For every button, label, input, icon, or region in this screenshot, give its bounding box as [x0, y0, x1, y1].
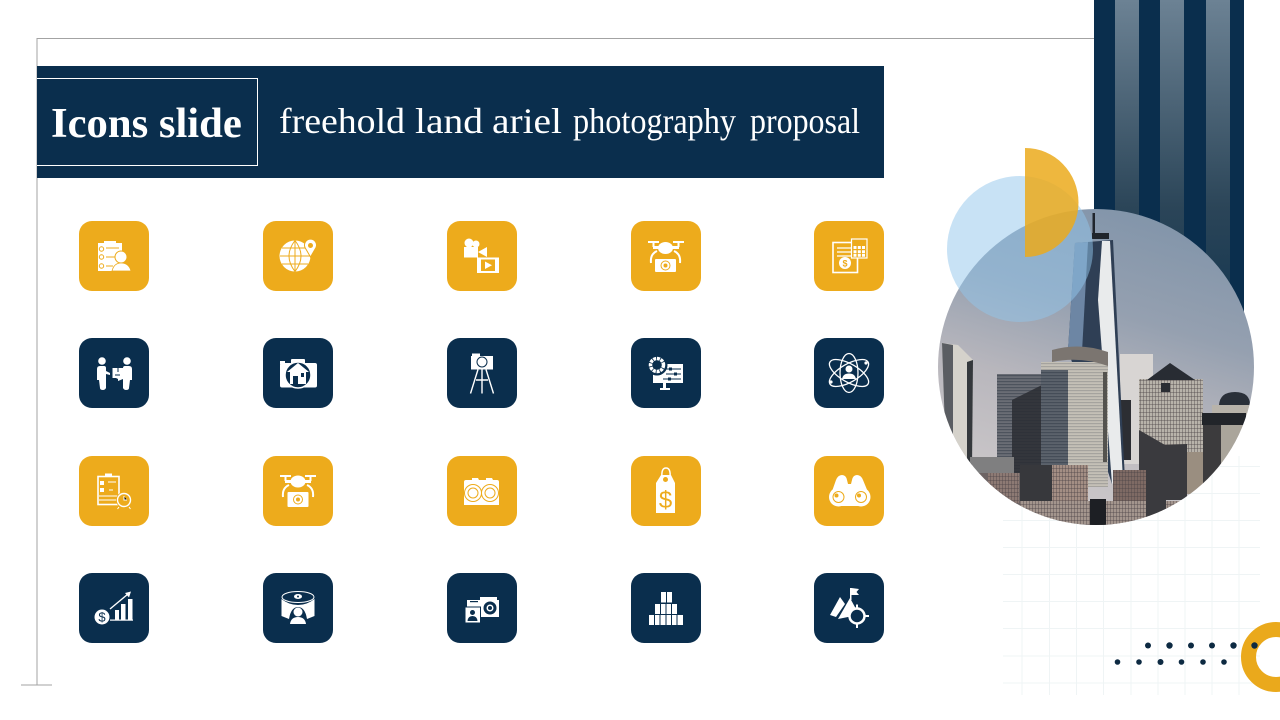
- icon: atom with person: [814, 338, 884, 408]
- subtitle: [279, 101, 860, 141]
- icon: camera with portrait photo: [447, 573, 517, 643]
- icon: video camera and player: [447, 221, 517, 291]
- spire tower: [1068, 213, 1125, 484]
- left building: [942, 343, 973, 470]
- subtitle: land: [415, 101, 483, 141]
- icon: schedule clipboard and clock: [79, 456, 149, 526]
- icon: stacked boxes: [631, 573, 701, 643]
- title banner: [37, 66, 884, 178]
- white tower behind: [1120, 354, 1153, 464]
- domed building: [1202, 392, 1251, 490]
- icon: camera with twin lenses: [447, 456, 517, 526]
- icon: camera drone: [263, 456, 333, 526]
- dot over ring: [1251, 642, 1258, 649]
- icon: money growth chart: [79, 573, 149, 643]
- background grid: [1003, 456, 1260, 695]
- icon: two people exchanging a box: [79, 338, 149, 408]
- icon: 360 degree view with person: [263, 573, 333, 643]
- subtitle: freehold: [279, 101, 405, 141]
- low-rise brick buildings: [970, 452, 1210, 529]
- icon: invoice and calculator: [814, 221, 884, 291]
- icon: camera with house: [263, 338, 333, 408]
- icon: price tag: [631, 456, 701, 526]
- icon: gear and monitor settings: [631, 338, 701, 408]
- icon: binoculars: [814, 456, 884, 526]
- icon: camera on tripod: [447, 338, 517, 408]
- icon: mountain flag and target: [814, 573, 884, 643]
- title box: [37, 78, 258, 166]
- heading: Icons slide: [51, 100, 242, 147]
- icon: invoice and calculator: $: [842, 258, 848, 268]
- decorative blue circle: [947, 176, 1093, 322]
- icon: globe with pin: [263, 221, 333, 291]
- photo: city skyline in circle: [930, 200, 1260, 530]
- round tower: [1041, 346, 1108, 487]
- icon: camera drone: [631, 221, 701, 291]
- decorative yellow semicircle: [1025, 148, 1078, 257]
- subtitle: proposal: [750, 101, 860, 141]
- dotted pattern: [1115, 642, 1237, 665]
- icon: money growth chart: $: [98, 610, 106, 624]
- hexagonal tower: [1139, 363, 1203, 500]
- yellow ring: [1248, 630, 1280, 684]
- subtitle: photography: [573, 101, 736, 141]
- dark office block: [997, 374, 1042, 504]
- subtitle: ariel: [492, 101, 562, 141]
- icon: price tag: $: [659, 487, 672, 514]
- panel: vertical stripes: [1094, 0, 1244, 320]
- icon: checklist and person: [79, 221, 149, 291]
- frame lines: [21, 38, 1094, 686]
